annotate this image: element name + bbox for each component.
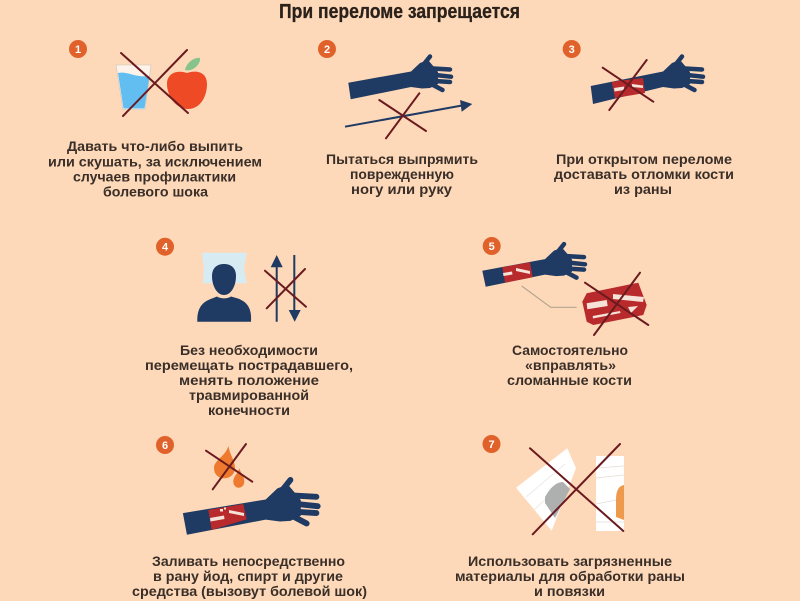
number badge 6: 6 <box>162 440 168 452</box>
icon: cross <box>379 93 426 138</box>
text: item 4: конечности <box>208 402 290 418</box>
icon: drops <box>214 446 244 488</box>
text: item 4: менять положение <box>179 372 319 388</box>
arrow: up and down <box>271 255 301 322</box>
panel: item 1 no food or drink <box>48 40 262 200</box>
icon: arm <box>348 56 451 99</box>
text: item 6: средства (вызовут болевой шок) <box>132 583 367 599</box>
number badge 5 <box>483 237 501 255</box>
icon: dirty gauze <box>516 448 576 531</box>
icon: arm with wound <box>183 480 318 535</box>
icon: person on pillow <box>197 253 251 322</box>
text: item 6: Заливать непосредственно <box>152 553 345 569</box>
number badge 3 <box>563 40 581 58</box>
text: item 3: При открытом переломе <box>556 151 732 167</box>
icon: cross <box>265 269 306 308</box>
icon: glass of water <box>116 65 151 110</box>
number badge 7 <box>482 435 500 453</box>
number badge 4: 4 <box>162 242 169 254</box>
text: item 2: Пытаться выпрямить <box>326 151 478 167</box>
panel: item 7 no dirty materials <box>455 435 685 599</box>
number badge 2 <box>318 40 336 58</box>
text: item 3 <box>554 151 734 197</box>
text: item 1: или скушать, за исключением <box>48 154 262 170</box>
text: item 7 <box>455 553 685 599</box>
text: item 5: Самостоятельно <box>512 342 628 358</box>
text: item 5: «вправлять» <box>525 357 616 373</box>
text: item 4: Без необходимости <box>180 342 318 358</box>
icon: cross <box>585 273 648 335</box>
text: item 6: в рану йод, спирт и другие <box>153 568 343 584</box>
text: item 3: доставать отломки кости <box>554 166 734 182</box>
text: item 1: болевого шока <box>103 184 208 200</box>
number badge 1: 1 <box>75 44 81 56</box>
text: item 5 <box>507 342 632 388</box>
number badge 1 <box>69 40 87 58</box>
text: item 1: случаев профилактики <box>73 168 236 184</box>
panel: item 5 do not set bones <box>482 237 648 388</box>
icon: cross <box>121 50 188 116</box>
text: item 2 <box>326 151 478 197</box>
icon: bandage <box>596 456 624 531</box>
text: item 1: Давать что-либо выпить <box>67 138 243 154</box>
text: item 5: сломанные кости <box>507 372 632 388</box>
text: item 4: перемещать пострадавшего, <box>145 357 353 373</box>
panel: item 2 do not straighten <box>318 40 478 197</box>
text: item 2: ногу или руку <box>351 181 452 197</box>
title: При переломе запрещается <box>279 1 520 23</box>
panel: item 4 do not move casualty <box>145 238 353 418</box>
line: callout connector <box>522 286 577 307</box>
text: item 1 <box>48 138 262 200</box>
text: item 7: материалы для обработки раны <box>455 568 685 584</box>
icon: arm with wound <box>482 244 585 287</box>
text: item 4 <box>145 342 353 418</box>
number badge 3: 3 <box>569 44 575 56</box>
icon: apple <box>167 58 207 109</box>
text: item 7: и повязки <box>534 583 605 599</box>
number badge 4 <box>156 238 174 256</box>
icon: arm with wound <box>591 56 703 104</box>
text: item 4: травмированной <box>189 387 309 403</box>
panel: item 6 do not pour iodine into wound <box>132 436 367 599</box>
number badge 6 <box>156 436 174 454</box>
arrow: straightening direction <box>345 100 472 127</box>
panel: item 3 do not remove bone fragments <box>554 40 734 197</box>
icon: cross <box>206 444 252 489</box>
text: item 2: поврежденную <box>350 166 454 182</box>
text: item 6 <box>132 553 367 599</box>
text: item 7: Использовать загрязненные <box>468 553 672 569</box>
number badge 2: 2 <box>324 44 330 56</box>
text: item 3: из раны <box>614 181 672 197</box>
number badge 7: 7 <box>488 439 495 451</box>
icon: enlarged wound <box>582 283 647 325</box>
number badge 5: 5 <box>489 241 495 253</box>
icon: cross <box>603 60 653 110</box>
icon: cross <box>530 444 623 534</box>
